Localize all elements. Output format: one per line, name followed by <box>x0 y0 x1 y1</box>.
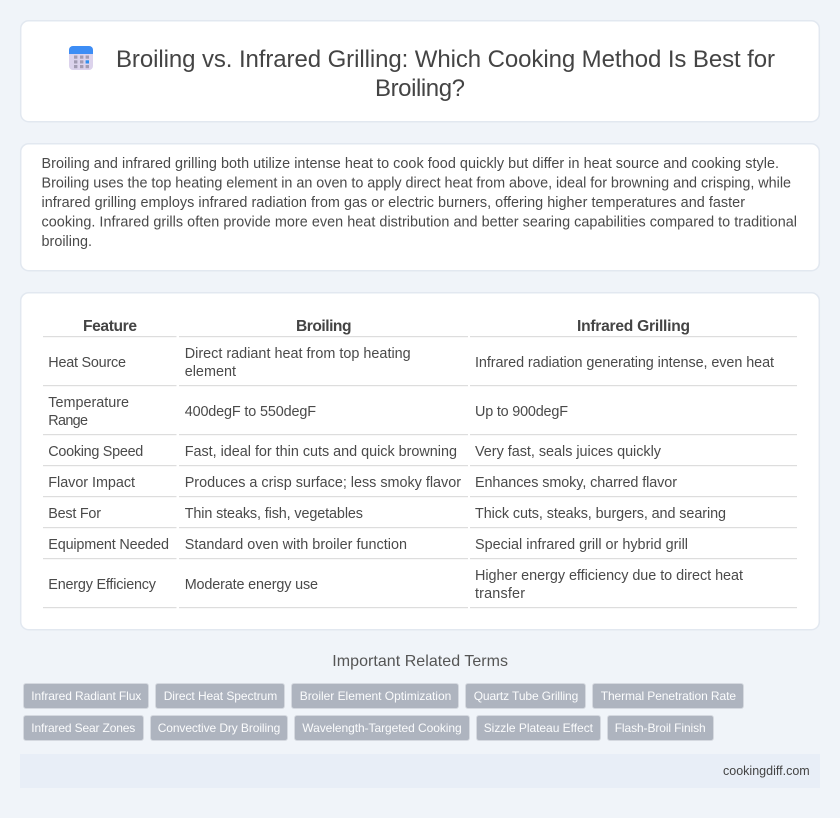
row: equipment needed: Equipment Needed <box>48 537 169 553</box>
tag: Sizzle Plateau Effect <box>484 721 594 735</box>
row: temperature range: Temperature <box>48 395 129 411</box>
tag <box>476 716 600 740</box>
row: flavor impact: Enhances smoky, charred flavor <box>475 475 677 491</box>
intro text: infrared grilling employs infrared radiation from gas or electric burners, offering higher temperatures and faster <box>42 195 745 211</box>
table header: Feature <box>83 318 137 335</box>
row: energy efficiency: Higher energy efficiency due to direct heat <box>475 568 743 584</box>
row: best for: Thin steaks, fish, vegetables <box>185 506 363 522</box>
row: temperature range: Up to 900degF <box>475 404 568 420</box>
row: heat source: Heat Source <box>48 355 126 371</box>
tag: Wavelength-Targeted Cooking <box>302 721 462 735</box>
row: best for: Thick cuts, steaks, burgers, and searing <box>475 506 726 522</box>
tag: Infrared Sear Zones <box>31 721 135 735</box>
title: Broiling vs. Infrared Grilling: Which Cooking Method Is Best for <box>116 46 775 73</box>
row: energy efficiency: transfer <box>475 586 525 602</box>
intro text: cooking. Infrared grills often provide more even heat distribution and better searing capabilities compared to traditional <box>42 214 797 230</box>
tag <box>592 684 744 708</box>
tag: Infrared Radiant Flux <box>31 689 141 703</box>
row: cooking speed: Fast, ideal for thin cuts and quick browning <box>185 444 457 460</box>
footer <box>20 754 820 788</box>
row: equipment needed: Standard oven with broiler function <box>185 537 407 553</box>
row: heat source: element <box>185 364 236 380</box>
row: cooking speed <box>48 444 662 460</box>
heading: important related terms: Important Related Terms <box>332 653 508 670</box>
row: equipment needed <box>48 537 688 553</box>
row: equipment needed: Special infrared grill or hybrid grill <box>475 537 688 553</box>
row: temperature range: 400degF to 550degF <box>185 404 316 420</box>
table header: Broiling <box>296 318 352 335</box>
intro text: Broiling uses the top heating element in an oven to apply direct heat from above, ideal for browning and crisping, while <box>42 176 791 192</box>
row: flavor impact <box>48 475 677 491</box>
tag <box>24 684 148 708</box>
intro text: Broiling and infrared grilling both utilize intense heat to cook food quickly but differ in heat source and cooking style. <box>42 156 779 172</box>
table header: Infrared Grilling <box>577 318 690 335</box>
tag <box>24 716 144 740</box>
intro text: broiling. <box>42 234 92 250</box>
tag <box>466 684 586 708</box>
title <box>116 46 775 102</box>
tag: Direct Heat Spectrum <box>164 689 277 703</box>
row: best for: Best For <box>48 506 101 522</box>
row: energy efficiency: Energy Efficiency <box>48 577 157 593</box>
row: temperature range: Range <box>48 413 88 429</box>
row: heat source: Direct radiant heat from top heating <box>185 346 411 362</box>
tag: Thermal Penetration Rate <box>601 689 736 703</box>
row: cooking speed: Very fast, seals juices quickly <box>475 444 662 460</box>
title: Broiling? <box>375 75 465 102</box>
footer: cookingdiff.com <box>723 764 810 778</box>
tag: Flash-Broil Finish <box>615 721 706 735</box>
row: flavor impact: Produces a crisp surface; less smoky flavor <box>185 475 461 491</box>
tag: Broiler Element Optimization <box>300 689 451 703</box>
tag <box>150 716 288 740</box>
row: heat source <box>48 346 774 380</box>
tag <box>294 716 470 740</box>
tag <box>608 716 714 740</box>
table header <box>83 318 690 335</box>
row: temperature range <box>48 395 568 429</box>
panel: introduction <box>21 144 819 271</box>
tag <box>292 684 458 708</box>
tag: Convective Dry Broiling <box>158 721 280 735</box>
intro text <box>42 156 797 250</box>
icon: calendar <box>69 46 93 70</box>
row: energy efficiency <box>48 568 743 602</box>
row: best for <box>48 506 726 522</box>
tag: Quartz Tube Grilling <box>474 689 578 703</box>
tag <box>156 684 284 708</box>
title card <box>21 21 819 122</box>
panel: comparison table <box>21 293 819 630</box>
tags: related terms <box>24 684 744 740</box>
row: flavor impact: Flavor Impact <box>48 475 135 491</box>
row: energy efficiency: Moderate energy use <box>185 577 318 593</box>
row: heat source: Infrared radiation generating intense, even heat <box>475 355 774 371</box>
row: cooking speed: Cooking Speed <box>48 444 143 460</box>
